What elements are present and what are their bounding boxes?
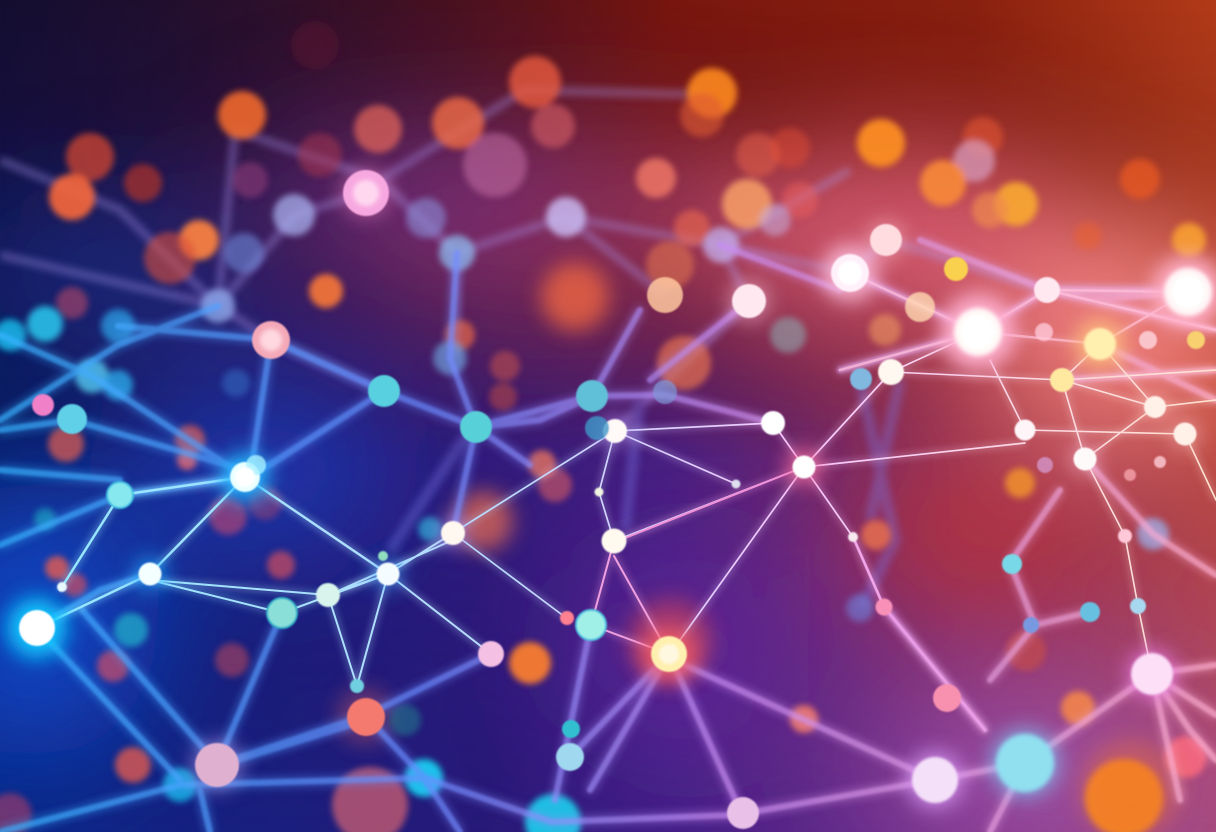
network nodes: blue side xyxy=(19,170,584,787)
far blurred network links xyxy=(0,90,1188,610)
bright node cores xyxy=(22,261,1204,643)
bokeh: blue and lilac circles xyxy=(0,194,1169,832)
network nodes: bright right cluster xyxy=(905,257,1212,803)
soft glow halos around hub nodes xyxy=(7,169,1216,808)
bokeh: blurred orange glows xyxy=(337,263,1180,832)
network nodes: centre xyxy=(441,224,904,829)
thick glowing links foreground xyxy=(0,240,1216,832)
fine bright links xyxy=(37,273,1216,730)
